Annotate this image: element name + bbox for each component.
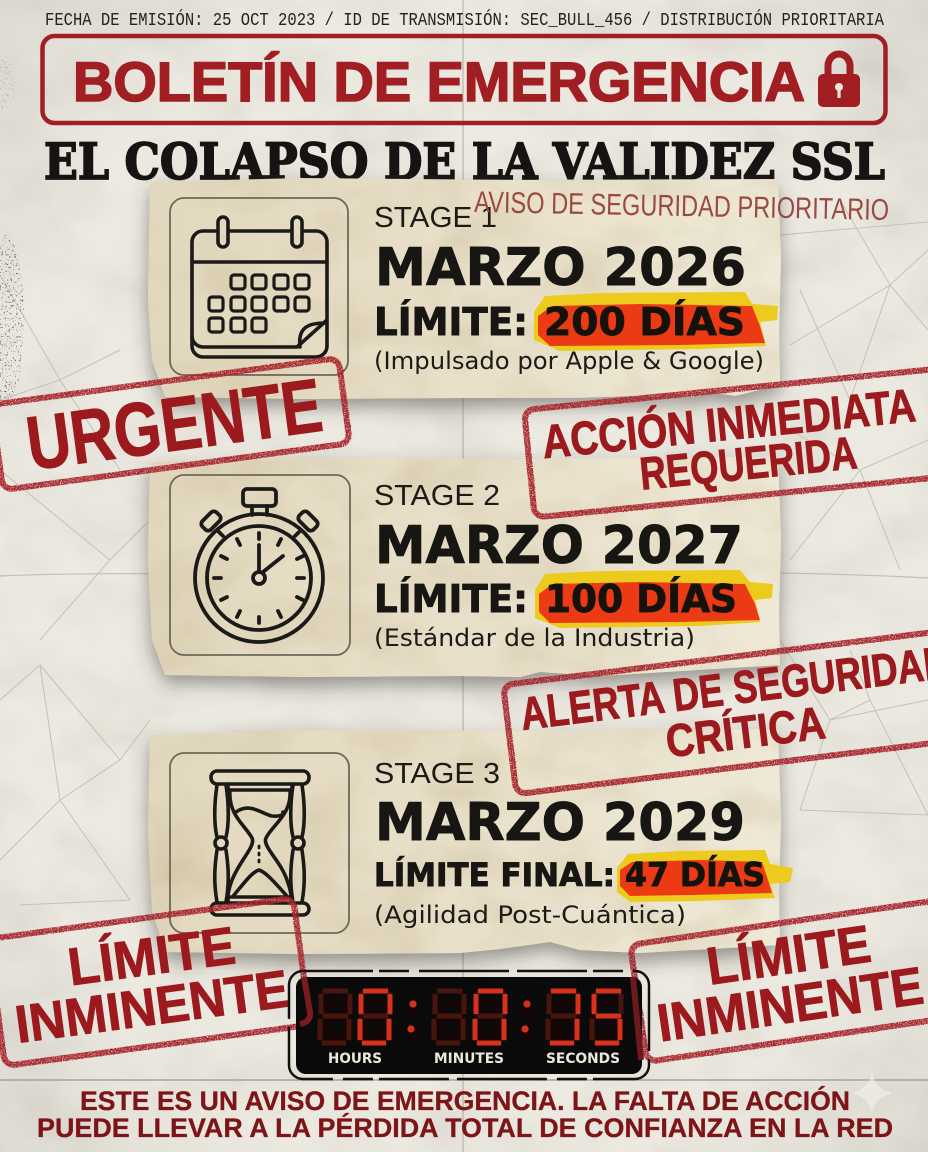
highlight 100 días	[535, 570, 773, 628]
icon: hourglass	[170, 753, 349, 933]
icon: sparkle	[851, 1073, 893, 1113]
crítica text: CRÍTICA	[663, 696, 828, 767]
límite label: LÍMITE:	[374, 577, 528, 621]
countdown timer	[289, 971, 649, 1079]
footer warning	[37, 1086, 893, 1143]
countdown timer: 00:00:05	[317, 989, 623, 1060]
stage 1 note: (Impulsado por Apple & Google)	[374, 347, 764, 375]
límite text: LÍMITE	[64, 915, 239, 997]
límite text: LÍMITE	[703, 914, 875, 997]
stamp: límite inminente right	[630, 899, 928, 1062]
seven-segment digits	[320, 991, 621, 1043]
stage 2 date: MARZO 2027	[375, 516, 743, 576]
inminente text: INMINENTE	[12, 960, 292, 1055]
colons	[407, 1000, 531, 1033]
stamp: alerta de seguridad	[503, 624, 928, 794]
panel: stage 2	[148, 457, 781, 677]
100 días value: 100 DÍAS	[545, 577, 737, 621]
icon: padlock	[818, 54, 860, 107]
stage 1 label: STAGE 1	[374, 202, 497, 234]
icon: calendar	[170, 198, 348, 375]
paper card 1	[148, 178, 781, 399]
stage 2 note: (Estándar de la Industria)	[374, 624, 695, 652]
urgente text: URGENTE	[21, 363, 327, 487]
límite final label: LÍMITE FINAL:	[374, 856, 615, 894]
timer labels	[328, 1051, 620, 1067]
footer warning: PUEDE LLEVAR A LA PÉRDIDA TOTAL DE CONFIANZA EN LA RED	[37, 1113, 893, 1143]
requerida text: REQUERIDA	[637, 426, 859, 500]
highlight 47 días	[617, 850, 793, 902]
stamp: urgente	[0, 358, 350, 491]
paper card 3	[148, 729, 781, 954]
stamp: acción inmediata	[524, 360, 928, 517]
paper card 2	[148, 457, 781, 677]
200 días value: 200 DÍAS	[544, 300, 745, 344]
panel: stage 1	[148, 178, 781, 399]
panel: stage 3	[148, 729, 793, 954]
banner heading: BOLETÍN DE EMERGENCIA	[73, 50, 805, 113]
footer warning: ESTE ES UN AVISO DE EMERGENCIA. LA FALTA DE ACCIÓN	[80, 1086, 850, 1116]
timer labels: SECONDS	[546, 1051, 620, 1067]
stage 3 label: STAGE 3	[374, 758, 500, 790]
47 días value: 47 DÍAS	[625, 854, 765, 894]
stage 3 note: (Agilidad Post-Cuántica)	[374, 901, 686, 929]
banner: boletín de emergencia	[42, 36, 886, 123]
timer labels: MINUTES	[434, 1051, 504, 1067]
timer labels: HOURS	[328, 1051, 382, 1067]
icon: stopwatch	[170, 475, 350, 655]
límite label: LÍMITE:	[374, 300, 528, 344]
stage 3 date: MARZO 2029	[375, 793, 745, 853]
stamp: límite inminente left	[0, 898, 310, 1066]
highlight 200 días	[534, 292, 778, 351]
stage 2 label: STAGE 2	[374, 480, 500, 512]
stage 1 date: MARZO 2026	[375, 238, 746, 298]
